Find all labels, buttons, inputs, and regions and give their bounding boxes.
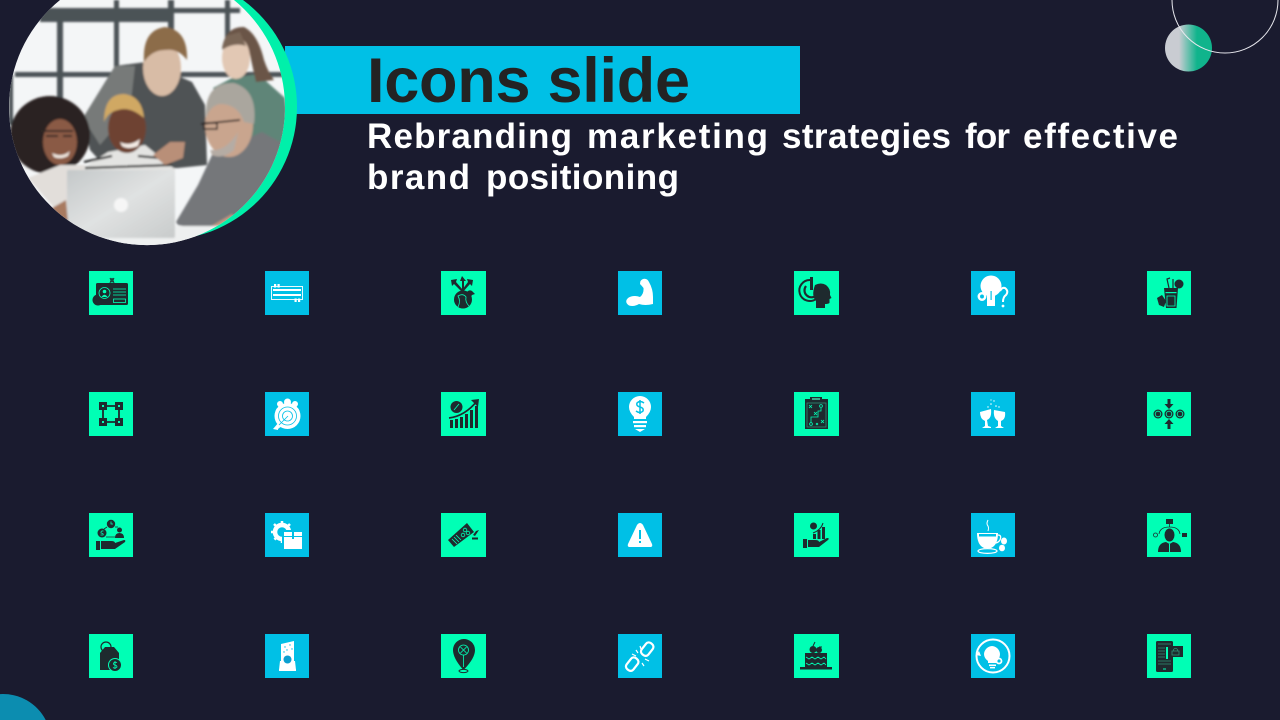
icon: wine glasses toast — [971, 392, 1015, 436]
icon: drink with fruit — [1147, 271, 1191, 315]
icon: globe with arrows and bird — [441, 271, 486, 315]
photo: team around a laptop — [0, 0, 300, 250]
subtitle: marketing — [587, 117, 768, 156]
icon: flexed arm — [618, 271, 662, 315]
icon: price tag with dollar — [89, 634, 133, 678]
icon: quote banner — [265, 271, 309, 315]
pointing hand — [153, 142, 185, 165]
photo ring: green crescent — [31, 0, 297, 240]
icon: id card — [89, 271, 133, 315]
icon: broken chain link — [618, 634, 662, 678]
icon: smartphone with lock card — [1147, 634, 1191, 678]
back right woman — [213, 74, 290, 145]
icon: hand with growth chart — [794, 513, 839, 557]
icon: audience target — [265, 392, 309, 436]
table and laptop — [100, 224, 219, 246]
subtitle: brand — [367, 158, 470, 197]
icon: map pin with cross — [441, 634, 486, 678]
icon: cake with cherries — [794, 634, 839, 678]
icon: connected squares — [89, 392, 133, 436]
left woman — [10, 96, 90, 174]
subtitle: for — [965, 117, 1010, 156]
subtitle: Rebranding — [367, 117, 572, 156]
icon: warning triangle — [618, 513, 662, 557]
icon: converging arrows on nodes — [1147, 392, 1191, 436]
title banner — [285, 46, 800, 114]
subtitle — [367, 117, 1178, 197]
icon: chocolate bar — [265, 634, 309, 678]
title: Icons slide — [367, 46, 690, 116]
icon: head with power symbol — [794, 271, 839, 315]
centre woman — [83, 145, 176, 175]
back man — [83, 62, 207, 172]
subtitle: strategies — [782, 117, 951, 156]
icon: rising chart with percent — [441, 392, 486, 436]
right man — [176, 132, 285, 232]
decorative circle: top right outline — [1172, 0, 1278, 53]
icon: hand holding time, money, people — [89, 513, 133, 557]
icon: gear and box — [265, 513, 309, 557]
icon: bulb, gear and question mark — [971, 271, 1015, 315]
icon: coffee cup and beans — [971, 513, 1015, 557]
icon: bulb with dollar sign — [618, 392, 662, 436]
icon: strategy clipboard — [794, 392, 839, 436]
corner circle: bottom left — [0, 694, 46, 720]
icon: businessman with process nodes — [1147, 513, 1191, 557]
icon: bulb in refresh circle — [971, 634, 1015, 678]
decorative orb: gradient — [1165, 24, 1212, 72]
subtitle: positioning — [486, 158, 679, 197]
subtitle: effective — [1023, 117, 1178, 156]
icon: diagonal ticket — [441, 513, 486, 557]
